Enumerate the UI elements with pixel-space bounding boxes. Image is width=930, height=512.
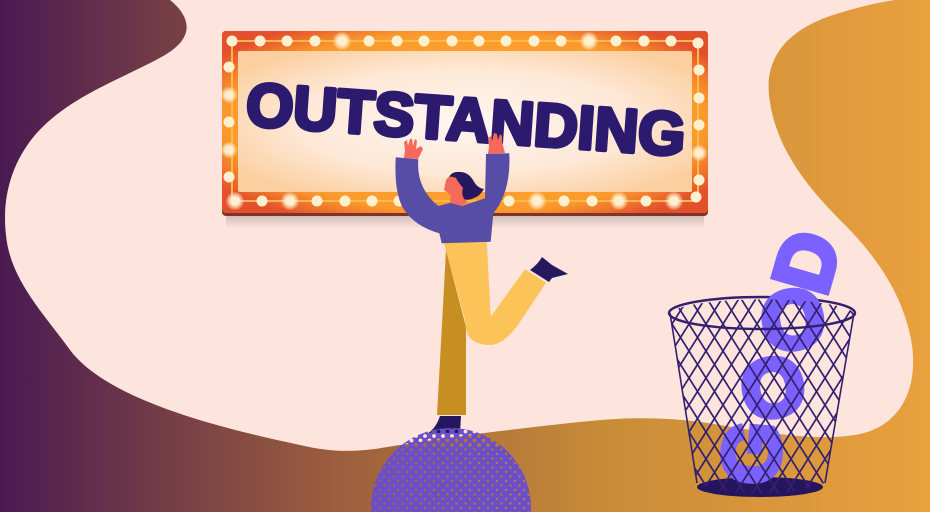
basket back rim <box>669 297 855 313</box>
basket front rim <box>669 313 855 329</box>
basket sides <box>670 313 854 483</box>
hair <box>449 172 484 200</box>
letter O upper: O <box>755 270 831 369</box>
sweater <box>395 153 509 243</box>
back leg <box>437 250 466 415</box>
marquee sign <box>221 31 708 228</box>
sign frame <box>222 31 708 216</box>
letter D: D <box>756 222 857 302</box>
sign lights <box>221 32 707 210</box>
sign panel <box>238 51 692 192</box>
letter G: G <box>705 418 799 488</box>
raised shoe <box>530 257 568 282</box>
sign shadow <box>226 215 704 228</box>
letter O lower: O <box>735 338 811 437</box>
halftone ball <box>371 428 531 512</box>
basket mesh <box>670 299 854 494</box>
standing shoe <box>428 416 461 433</box>
sign word: OUTSTANDING <box>244 70 688 169</box>
waste basket <box>669 222 857 497</box>
basket floor <box>697 477 823 497</box>
front leg <box>444 240 546 345</box>
hands <box>404 139 423 159</box>
neck and face <box>450 194 467 206</box>
woman <box>395 133 568 433</box>
